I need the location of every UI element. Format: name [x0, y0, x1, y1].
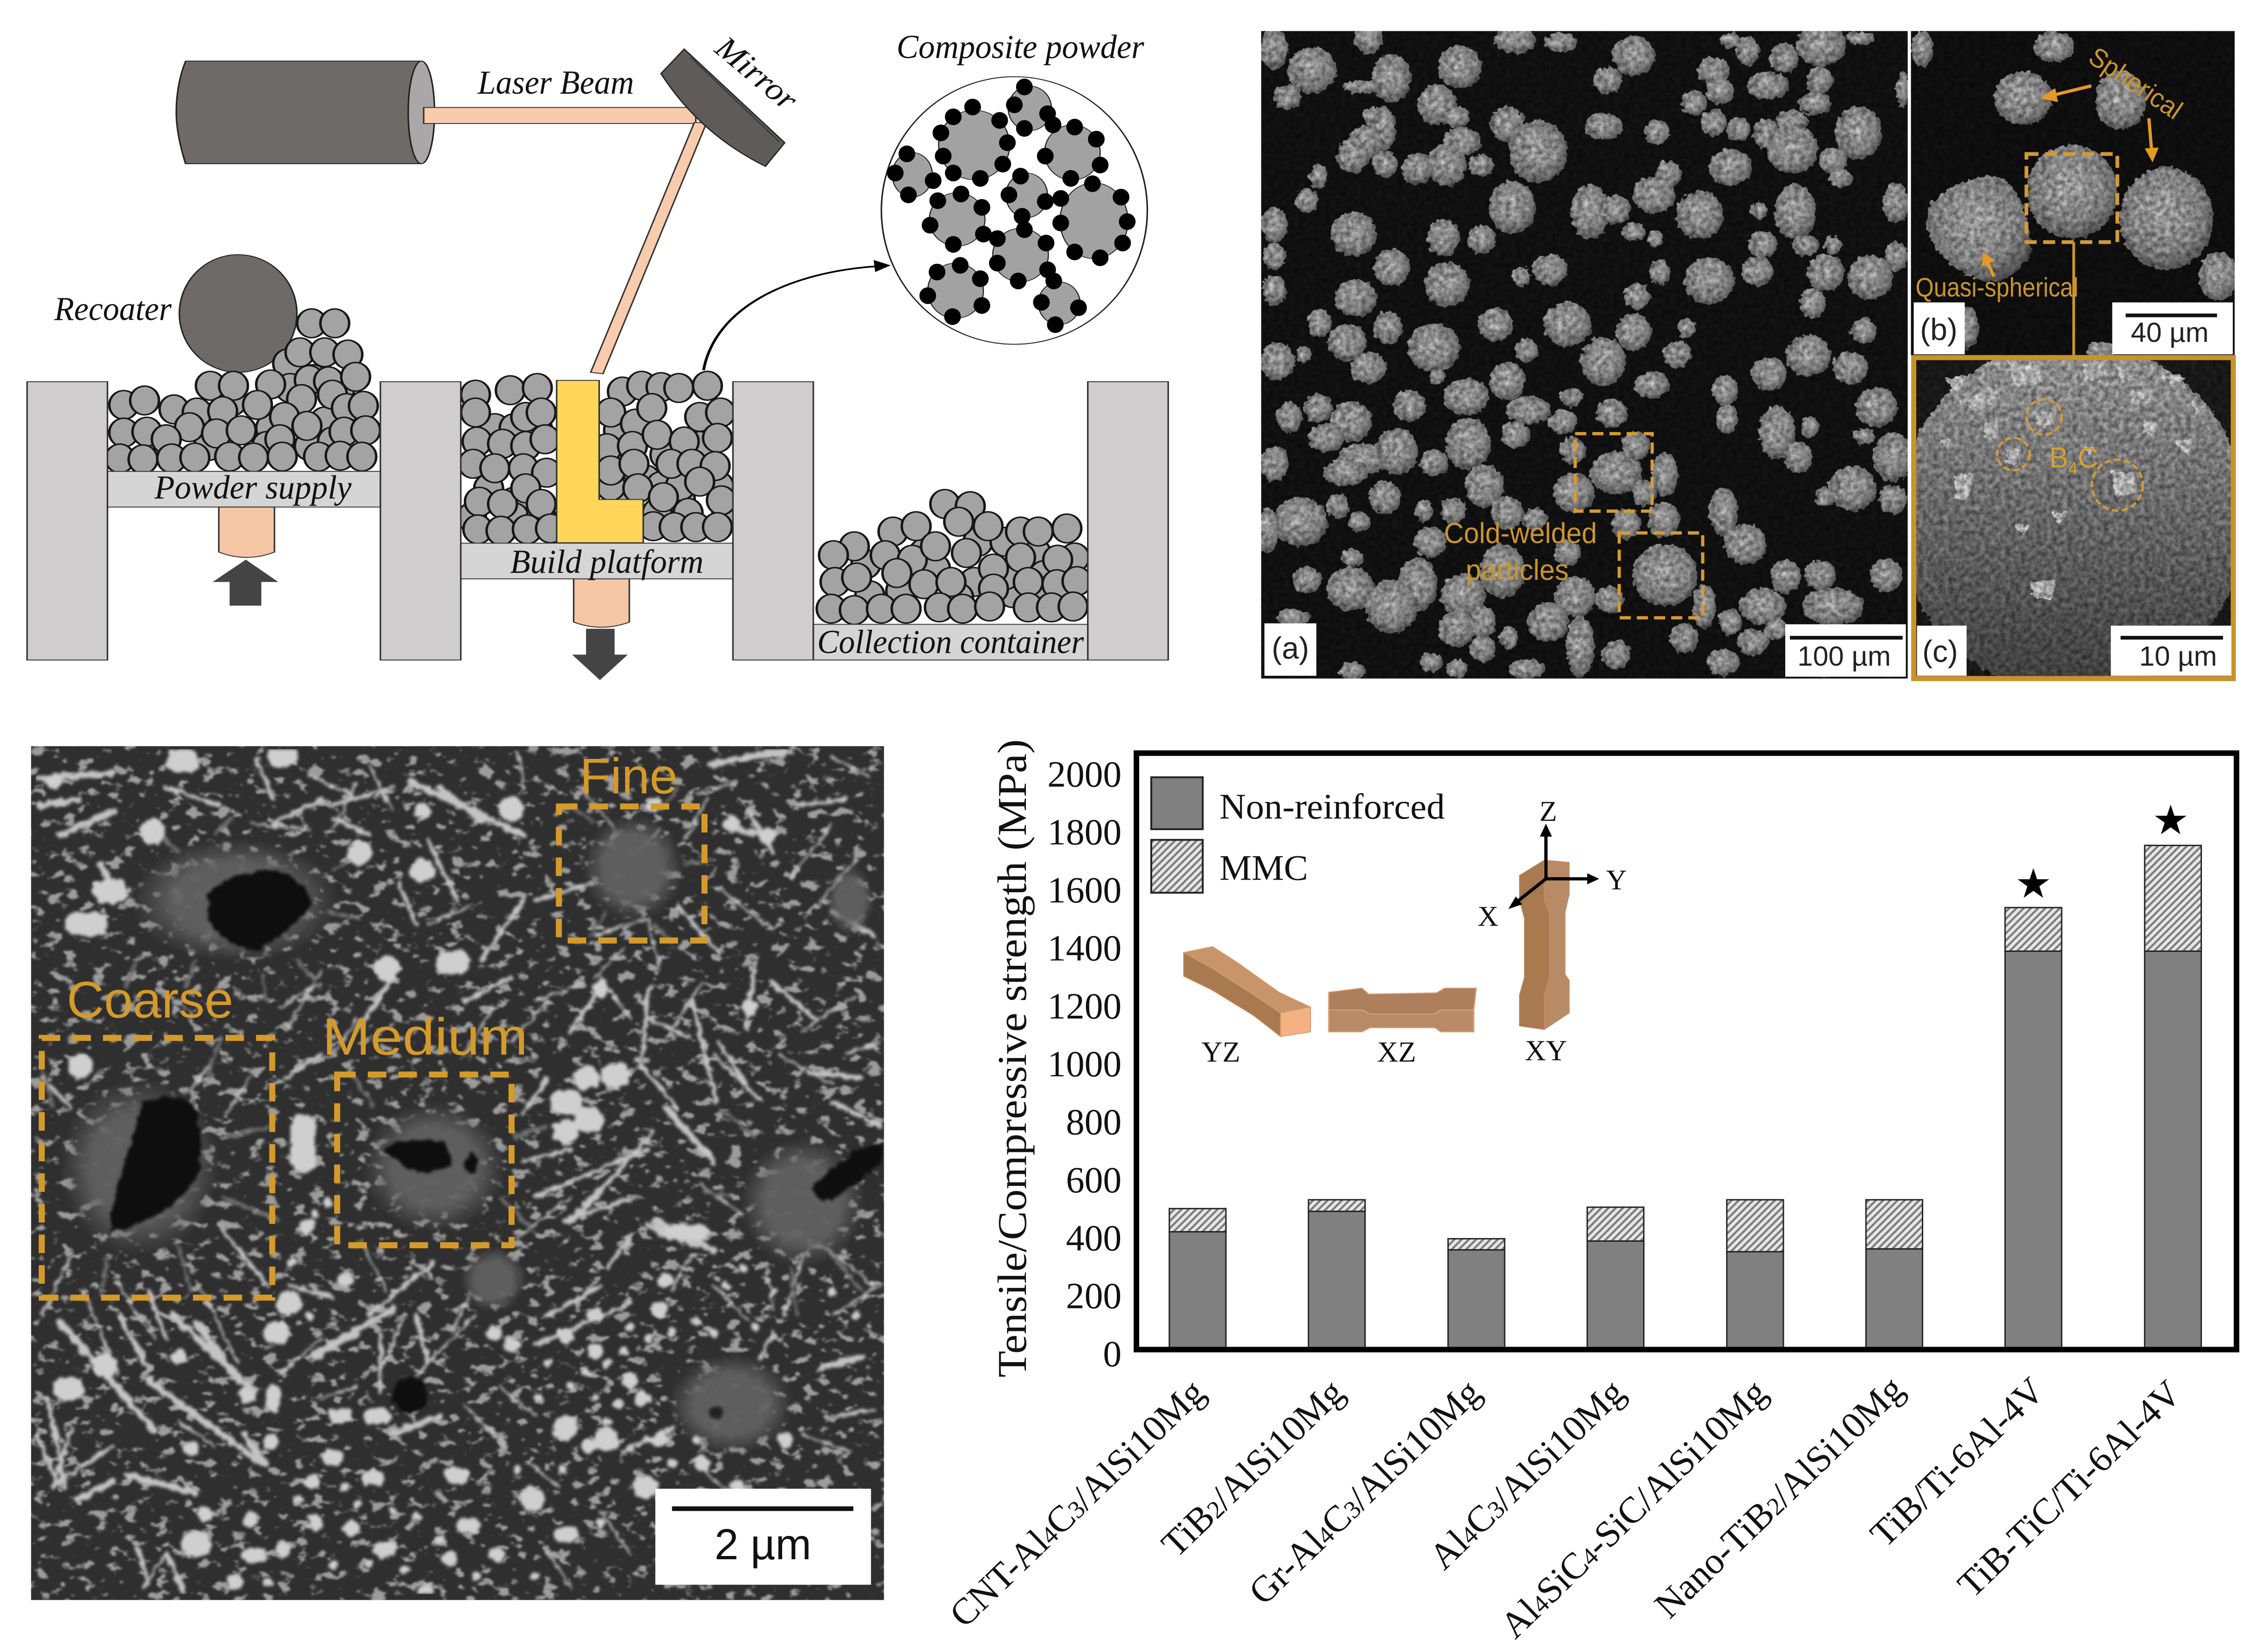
label: Medium: Medium — [323, 1007, 528, 1066]
schematic shapes — [27, 49, 1168, 680]
y axis ticks: 400 — [1066, 1218, 1121, 1259]
laser beam horizontal — [424, 108, 696, 124]
connector line b to c — [2072, 242, 2075, 357]
panel b: SEM particle shapes — [1911, 31, 2235, 355]
label: Recoater: Recoater — [54, 291, 172, 328]
y axis ticks: 1000 — [1047, 1044, 1121, 1085]
specimens drawing — [1183, 860, 1569, 1037]
scale bar 2 µm — [655, 1489, 871, 1585]
star marker bar 7 — [2018, 868, 2049, 898]
printed L part — [557, 380, 643, 543]
category 3: Gr-Al4C3/AlSi10Mg — [1241, 1371, 1489, 1613]
label: Build platform: Build platform — [510, 544, 703, 580]
specimen XY — [1520, 860, 1569, 1030]
frame c — [1914, 358, 2233, 679]
tag (b) — [1914, 303, 1965, 354]
legend: MMC: MMC — [1219, 847, 1308, 888]
y axis ticks: 1600 — [1047, 870, 1121, 911]
laser source — [176, 61, 434, 164]
bar Al4C3 — [1587, 1207, 1644, 1349]
pistons — [219, 507, 629, 627]
specimen XZ — [1329, 988, 1476, 1032]
tag (a): (a) — [1272, 631, 1309, 665]
dashed box: cold-welded upper — [1575, 434, 1652, 511]
label: B4C: 4 — [2068, 459, 2077, 478]
label: B4C: C — [2077, 442, 2098, 474]
dashed box: Fine — [559, 806, 704, 941]
bar TiB/Ti-6Al-4V — [2005, 908, 2062, 1349]
label: Cold-welded: Cold-welded — [1444, 517, 1597, 550]
mirror — [661, 49, 785, 166]
platforms — [108, 471, 1088, 660]
arrow: powder supply up — [213, 560, 278, 606]
axis arrowheads — [1508, 824, 1599, 909]
label: particles: particles — [1466, 554, 1568, 586]
axes triad — [1512, 834, 1593, 906]
y axis ticks: 600 — [1066, 1160, 1121, 1201]
y axis title: Tensile/Compressive strength (MPa) — [990, 739, 1035, 1377]
y axis ticks: 1800 — [1047, 812, 1121, 853]
category 4: Al4C3/AlSi10Mg — [1421, 1371, 1632, 1577]
recoater — [179, 255, 297, 372]
category 1: CNT-Al4C3/AlSi10Mg — [942, 1371, 1213, 1635]
tag (b): (b) — [1920, 312, 1958, 346]
panel: selective laser melting schematic — [27, 28, 1168, 680]
label: Powder supply: Powder supply — [154, 469, 351, 506]
scale bar 2 µm: 2 µm — [715, 1520, 812, 1569]
category 6: Nano-TiB2/AlSi10Mg — [1647, 1368, 1912, 1626]
arrow: build platform down — [572, 629, 628, 680]
label: Collection container: Collection container — [817, 624, 1084, 661]
annotations panel b — [1914, 41, 2233, 354]
stacked bars — [1169, 846, 2201, 1349]
blobs — [54, 755, 857, 1591]
label: Composite powder: Composite powder — [896, 28, 1145, 65]
build chamber powder — [457, 372, 741, 545]
scale bar 100 µm — [1785, 624, 1906, 677]
SEM particle c — [1916, 360, 2231, 676]
bar TiB2 — [1308, 1200, 1365, 1349]
axis label Y: Y — [1606, 864, 1627, 896]
y axis ticks: 2000 — [1047, 754, 1121, 795]
label: Spherical: Spherical — [2084, 41, 2187, 125]
tag (a) — [1265, 623, 1316, 676]
composite powder circle — [881, 77, 1147, 344]
dashed circles B4C — [1997, 399, 2143, 510]
axis label Z: Z — [1540, 796, 1557, 827]
category 5: Al4SiC4-SiC/AlSi10Mg — [1493, 1371, 1775, 1646]
background matrix — [19, 732, 900, 1613]
scale bar 100 µm: 100 µm — [1797, 640, 1891, 672]
dashed box: Medium — [337, 1074, 511, 1245]
category 2: TiB2/AlSi10Mg — [1154, 1371, 1352, 1565]
bar Gr-Al4C3 — [1448, 1239, 1505, 1349]
label: Coarse: Coarse — [67, 971, 233, 1029]
dashed box: selected particle — [2026, 154, 2117, 242]
label: Laser Beam: Laser Beam — [477, 64, 634, 101]
category 8: TiB-TiC/Ti-6Al-4V — [1950, 1372, 2189, 1605]
y axis ticks: 0 — [1103, 1334, 1121, 1375]
bar chart: tensile/compressive strength — [942, 739, 2236, 1646]
y axis ticks: 1200 — [1047, 986, 1121, 1027]
bar CNT-Al4C3 — [1169, 1209, 1226, 1349]
axis label X: X — [1478, 901, 1499, 932]
y axis ticks: 1400 — [1047, 928, 1121, 969]
label: Fine: Fine — [580, 748, 678, 804]
arrow: spherical left — [2040, 86, 2091, 102]
specimen label XY: XY — [1525, 1034, 1567, 1067]
scale bar 10 µm — [2111, 626, 2231, 676]
needles — [36, 749, 880, 1594]
specimen YZ — [1183, 947, 1310, 1037]
bar TiB-TiC/Ti-6Al-4V — [2145, 846, 2201, 1349]
dark holes — [110, 870, 883, 1420]
label: Quasi-spherical: Quasi-spherical — [1916, 273, 2078, 303]
collection container powder — [817, 489, 1091, 625]
specimen label YZ: YZ — [1201, 1035, 1240, 1068]
panel c: magnified particle with B4C — [1916, 360, 2231, 676]
dashed box: Coarse — [42, 1038, 272, 1298]
y axis ticks — [1047, 754, 1121, 1375]
spikes — [41, 788, 862, 1315]
panel a: SEM powder overview — [1261, 31, 1908, 679]
label: B4C: B — [2049, 442, 2068, 474]
legend: non-reinforced — [1151, 777, 1445, 829]
bar Nano-TiB2 — [1866, 1200, 1923, 1349]
scale bar 40 µm — [2112, 303, 2233, 354]
scale bar 40 µm: 40 µm — [2131, 317, 2208, 348]
SEM particles a — [1261, 31, 1908, 679]
powder supply powder — [105, 309, 380, 474]
arrow: powder to composite — [703, 260, 891, 370]
scale bar 10 µm: 10 µm — [2139, 640, 2217, 672]
bar Al4SiC4-SiC — [1727, 1200, 1783, 1349]
panel: SEM microstructure — [19, 732, 900, 1613]
category 7: TiB/Ti-6Al-4V — [1863, 1370, 2052, 1555]
specimen label XZ: XZ — [1377, 1035, 1416, 1068]
legend: MMC — [1151, 840, 1308, 893]
SEM particles b — [1911, 31, 2235, 355]
laser beam to part — [591, 123, 707, 374]
inset: build orientation specimens — [1183, 796, 1627, 1068]
x axis category labels — [942, 1368, 2189, 1646]
tag (c) — [1917, 626, 1967, 676]
star marker bar 8 — [2155, 805, 2187, 834]
annotations panel a — [1265, 434, 1906, 677]
legend: non-reinforced: Non-reinforced — [1219, 786, 1445, 826]
annotations panel c — [1914, 242, 2233, 679]
walls — [27, 382, 1168, 660]
mottled precipitates — [19, 732, 900, 1613]
plot frame — [1136, 753, 2236, 1349]
y axis ticks: 200 — [1066, 1276, 1121, 1317]
microstructure image — [36, 749, 883, 1594]
annotations microstructure — [42, 748, 871, 1585]
y axis ticks: 800 — [1066, 1102, 1121, 1143]
arrow: quasi-spherical — [1982, 252, 1995, 276]
halos — [60, 814, 874, 1454]
arrow: spherical right — [2145, 118, 2159, 162]
label: Mirror: Mirror — [708, 29, 805, 118]
legend — [1151, 777, 1445, 893]
dashed box: cold-welded lower — [1619, 533, 1703, 618]
tag (c): (c) — [1922, 634, 1958, 668]
